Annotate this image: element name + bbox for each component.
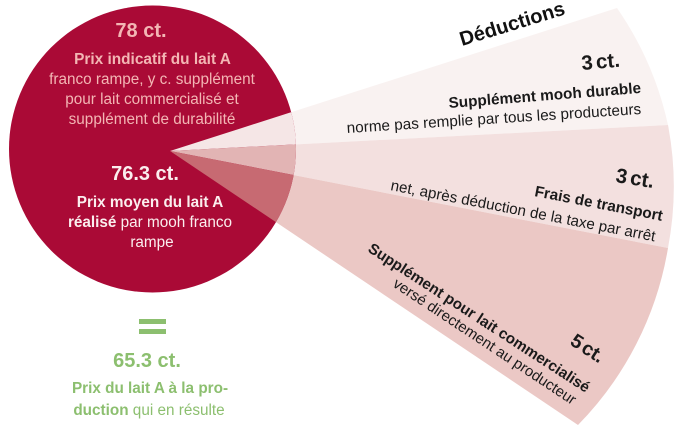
wedge: supplément pour lait commercialisé bbox=[170, 151, 668, 425]
text: 78 ct. indicative price: 78 ct. bbox=[115, 20, 167, 42]
wedge: supplément mooh durable bbox=[170, 8, 668, 151]
circle overlap of wedges bbox=[170, 112, 296, 222]
text: supplément mooh durable: 3 ct. bbox=[580, 49, 621, 75]
text: 65.3 ct. resulting price bbox=[72, 350, 228, 419]
wedge: frais de transport bbox=[170, 125, 674, 248]
text: 78 ct. indicative price: Prix indicatif du lait A bbox=[74, 51, 231, 68]
text: 78 ct. indicative price bbox=[49, 20, 256, 128]
text: 76.3 ct. average realised price bbox=[68, 163, 232, 251]
text: supplément pour lait commercialisé: 5 ct. bbox=[566, 330, 608, 368]
text: 76.3 ct. average realised price: Prix moyen du lait A bbox=[77, 194, 223, 211]
text: 78 ct. indicative price: supplément de durabilité bbox=[69, 111, 235, 128]
text: 76.3 ct. average realised price: 76.3 ct. bbox=[111, 163, 179, 185]
text: 78 ct. indicative price: franco rampe, y c. supplément bbox=[49, 71, 256, 88]
text: supplément pour lait commercialisé: versé directement au producteur bbox=[390, 275, 579, 409]
text: supplément mooh durable: norme pas remplie par tous les producteurs bbox=[346, 101, 642, 137]
text: frais de transport: net, après déduction de la taxe par arrêt bbox=[389, 177, 658, 245]
text: 65.3 ct. resulting price: duction qui en résulte bbox=[73, 402, 225, 419]
text: 76.3 ct. average realised price: rampe bbox=[130, 234, 174, 251]
text: 65.3 ct. resulting price: 65.3 ct. bbox=[113, 350, 181, 372]
text: frais de transport: Frais de transport bbox=[533, 183, 664, 225]
text: 78 ct. indicative price: pour lait commercialisé et bbox=[65, 91, 239, 108]
text: supplément pour lait commercialisé: Supplément pour lait commercialisé bbox=[365, 240, 593, 396]
text: 65.3 ct. resulting price: Prix du lait A à la pro- bbox=[72, 380, 228, 397]
main circle bbox=[9, 6, 296, 292]
text: supplément mooh durable bbox=[346, 49, 642, 137]
text: 76.3 ct. average realised price: réalisé par mooh franco bbox=[68, 214, 232, 231]
icon: equals sign bbox=[139, 319, 166, 334]
text: frais de transport: 3 ct. bbox=[614, 164, 656, 193]
text: supplément mooh durable: Supplément mooh durable bbox=[448, 80, 642, 112]
